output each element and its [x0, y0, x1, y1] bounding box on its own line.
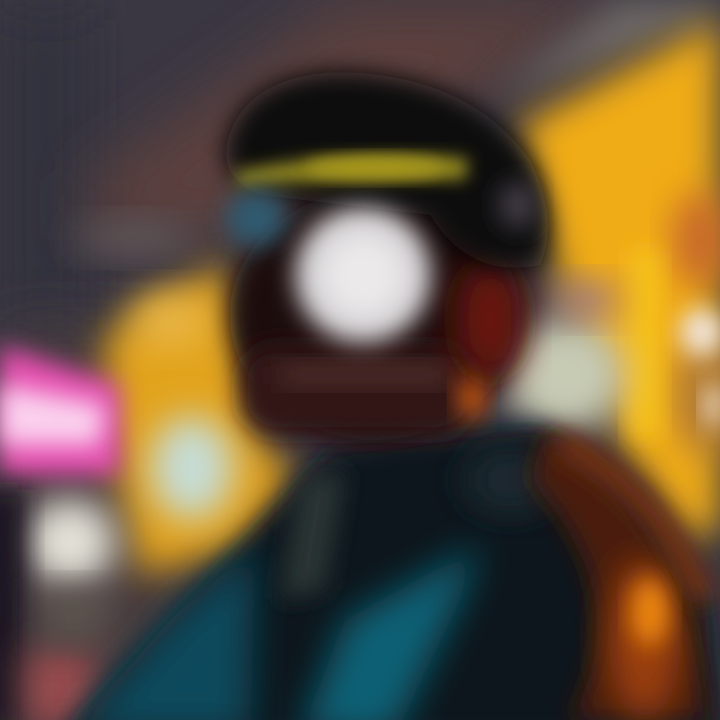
jacket: orange backpack strap — [530, 430, 705, 720]
cap band: yellow stripe — [235, 155, 468, 188]
head: face — [230, 190, 524, 440]
lower left dark figure and street — [0, 490, 110, 720]
background: yellow lit signs — [105, 20, 720, 575]
head: dark cap — [225, 72, 548, 268]
neon pink sign — [0, 345, 120, 475]
jacket: dark body — [60, 425, 720, 720]
background: pale storefront lights — [24, 280, 720, 586]
jacket: teal sleeve and chest — [70, 448, 556, 720]
white face circle — [295, 207, 431, 343]
glasses: blue reflection — [226, 181, 538, 246]
